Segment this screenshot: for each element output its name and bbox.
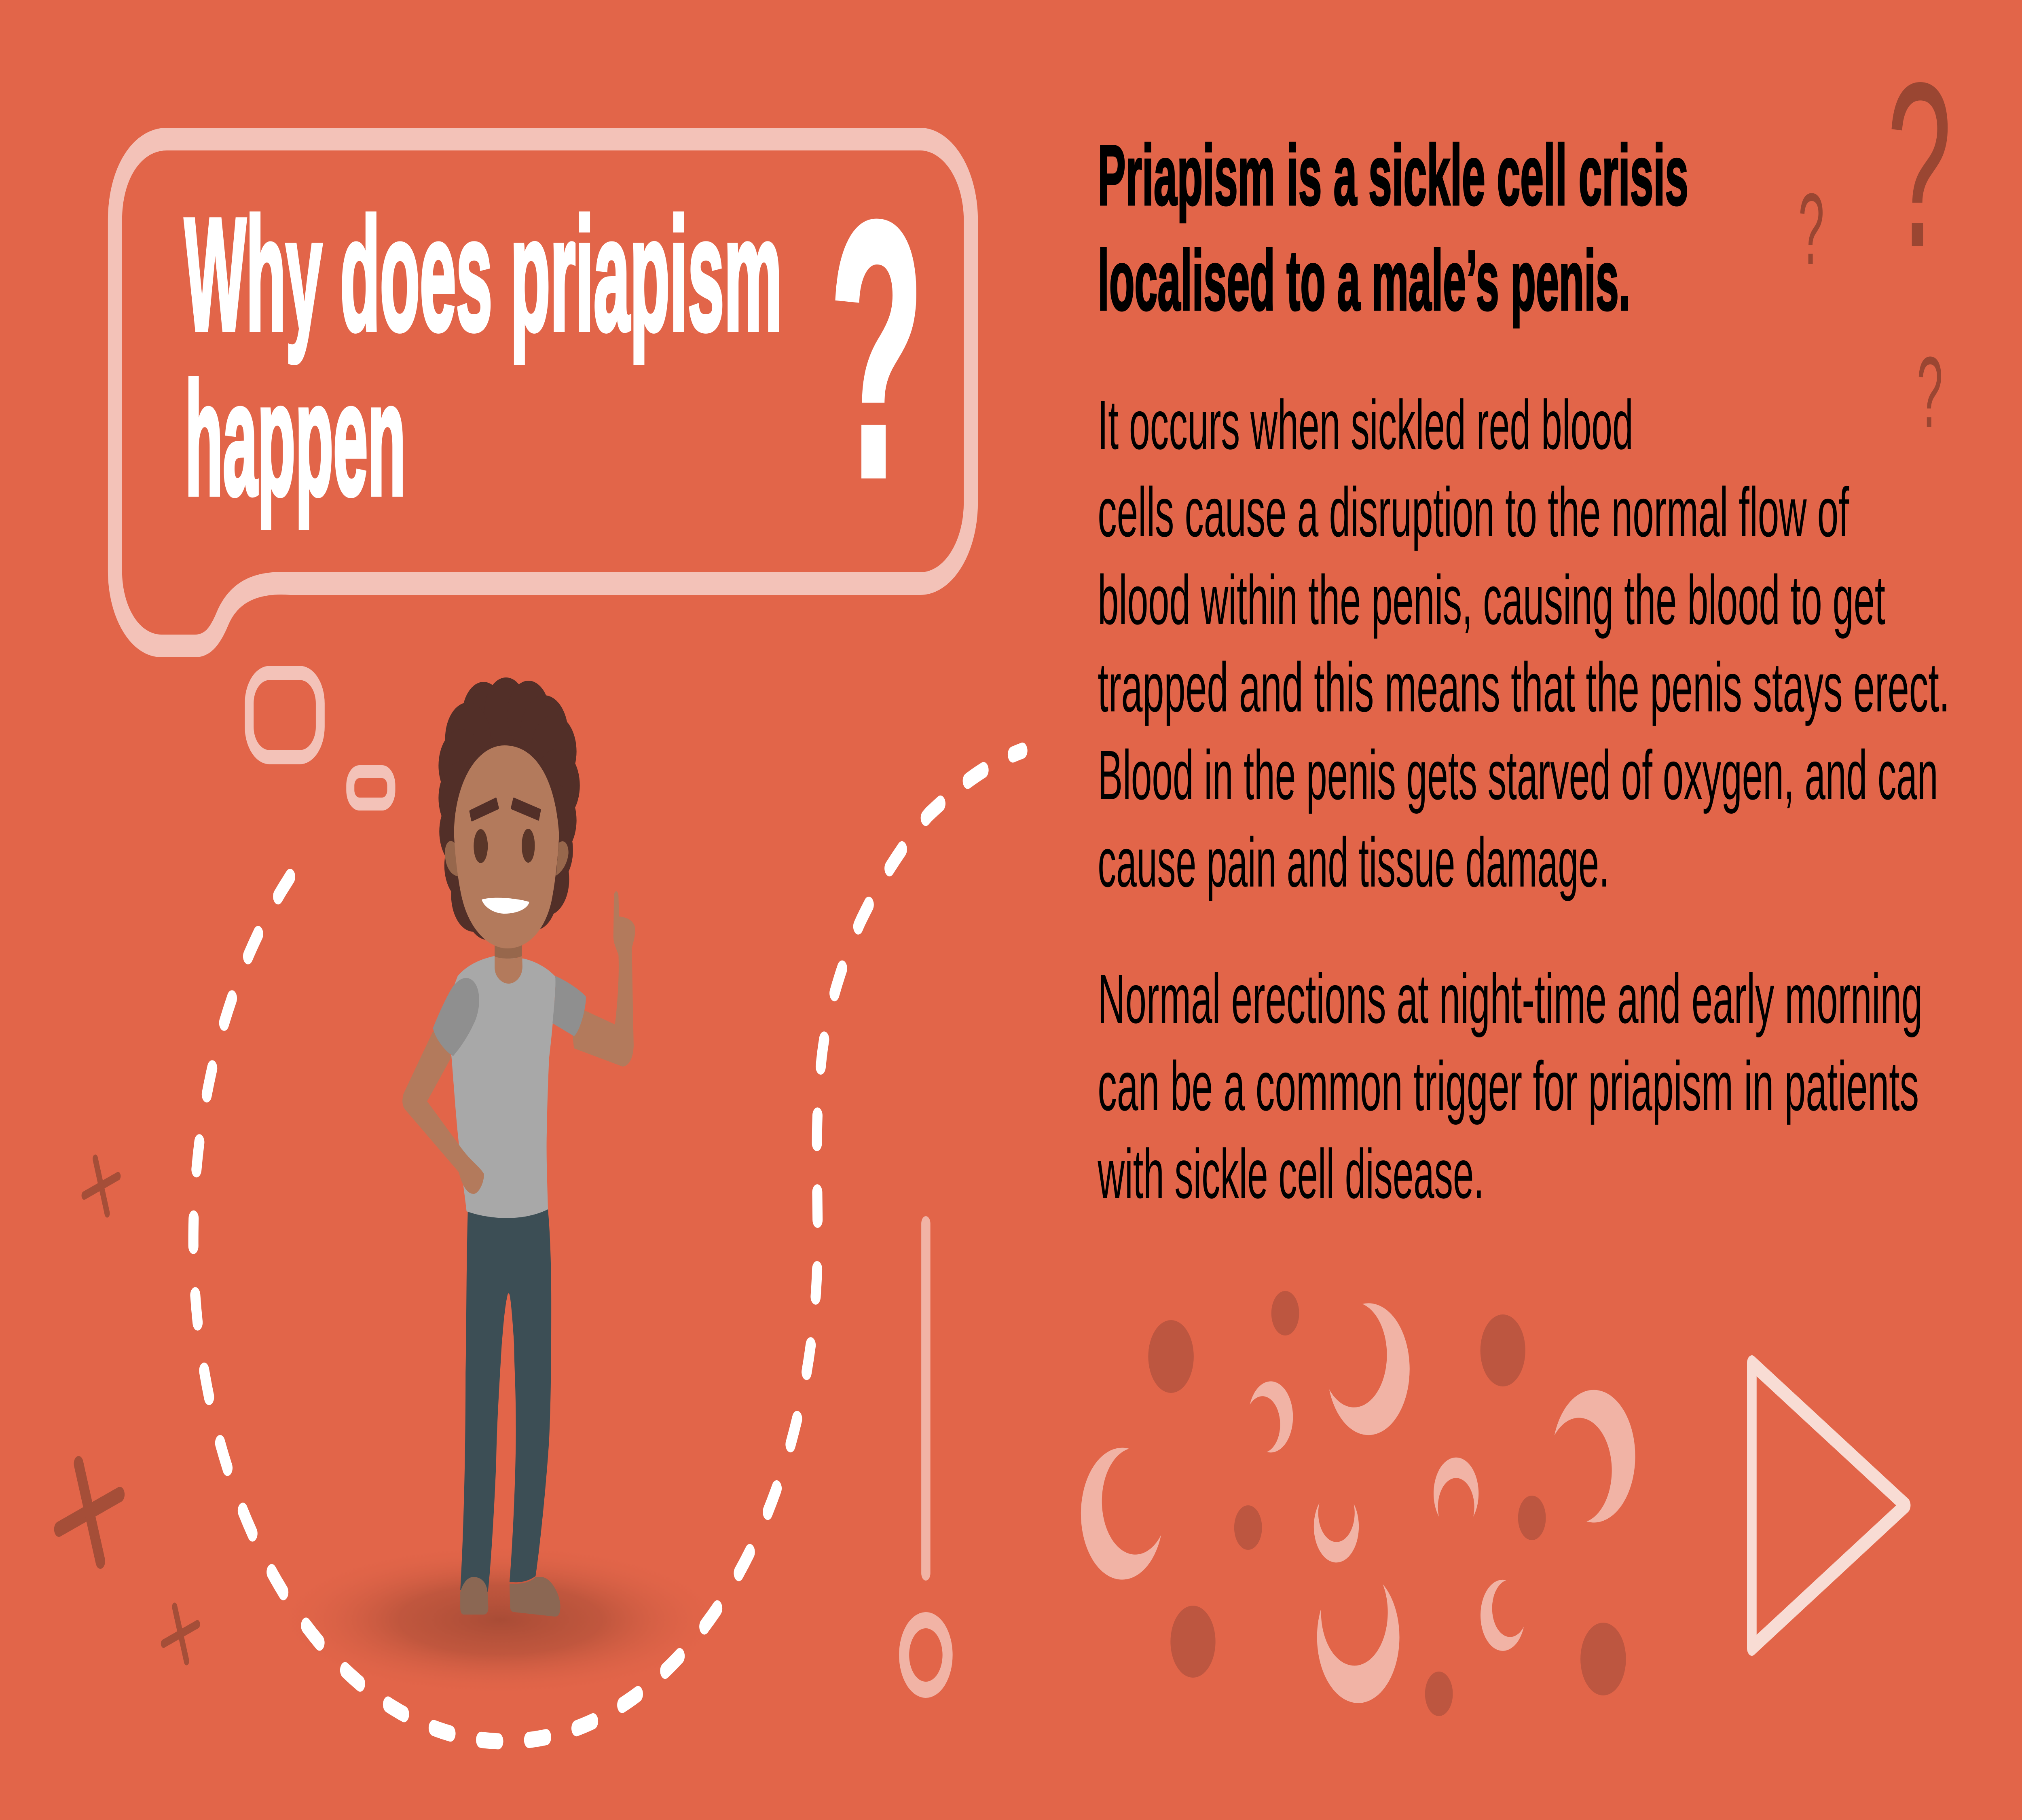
body paragraph one — [1098, 385, 1950, 902]
left eyebrow — [470, 799, 498, 820]
exclamation mark — [904, 1223, 948, 1690]
healthy dark cells — [1148, 1291, 1626, 1716]
cross: small upper — [84, 1159, 118, 1213]
left eye — [474, 829, 488, 863]
neck shadow — [495, 942, 522, 959]
cross: large — [59, 1464, 120, 1561]
heading: localised to a male’s penis. — [1098, 233, 1630, 328]
shirt — [440, 956, 556, 1218]
hair — [438, 677, 580, 940]
body paragraph one: cause pain and tissue damage. — [1098, 823, 1609, 902]
bubble outline — [115, 139, 971, 646]
body paragraph two: can be a common trigger for priapism in patients — [1098, 1047, 1919, 1125]
left arm and hand — [402, 1031, 484, 1194]
thought bubble: small — [350, 772, 391, 804]
play triangle arrow — [1752, 1363, 1906, 1648]
question mark: small left: ? — [1798, 173, 1824, 286]
body paragraph two: with sickle cell disease. — [1098, 1134, 1484, 1213]
left shoe — [460, 1577, 489, 1615]
title speech bubble — [115, 139, 971, 646]
heading: Priapism is a sickle cell crisis — [1098, 128, 1688, 223]
big question mark: ? — [829, 146, 924, 553]
right sleeve — [552, 976, 586, 1036]
left sleeve — [433, 978, 479, 1056]
character — [402, 677, 635, 1617]
title text: happen — [185, 350, 406, 529]
blood cells — [1081, 1291, 1635, 1716]
sickled crescent cells — [1081, 1303, 1635, 1703]
neck — [495, 956, 522, 984]
decorative question marks — [1798, 34, 1952, 449]
ground shadow — [273, 1543, 728, 1697]
question mark: large: ? — [1887, 34, 1952, 296]
face — [454, 745, 559, 948]
cross: small lower — [163, 1607, 197, 1661]
body paragraph one: It occurs when sickled red blood — [1098, 385, 1633, 464]
right arm — [569, 891, 635, 1067]
exclamation stem — [918, 1223, 933, 1573]
body paragraph two — [1098, 959, 1923, 1213]
right eyebrow — [512, 799, 540, 819]
title text: Why does priapism — [184, 185, 782, 364]
left ear — [445, 841, 459, 876]
trousers — [460, 1209, 551, 1592]
right eye — [522, 829, 535, 863]
thought bubble: large — [249, 673, 320, 757]
heading — [1098, 128, 1688, 328]
mouth — [482, 898, 529, 914]
title text — [184, 185, 782, 529]
right ear — [556, 841, 569, 876]
exclamation dot — [904, 1620, 948, 1690]
body paragraph two: Normal erections at night-time and early morning — [1098, 959, 1923, 1038]
body paragraph one: cells cause a disruption to the normal flow of — [1098, 473, 1849, 551]
right shoe — [510, 1577, 560, 1617]
body paragraph one: blood within the penis, causing the blood to get — [1098, 561, 1885, 639]
question mark: small right: ? — [1917, 336, 1943, 449]
dashed path — [193, 751, 1022, 1742]
